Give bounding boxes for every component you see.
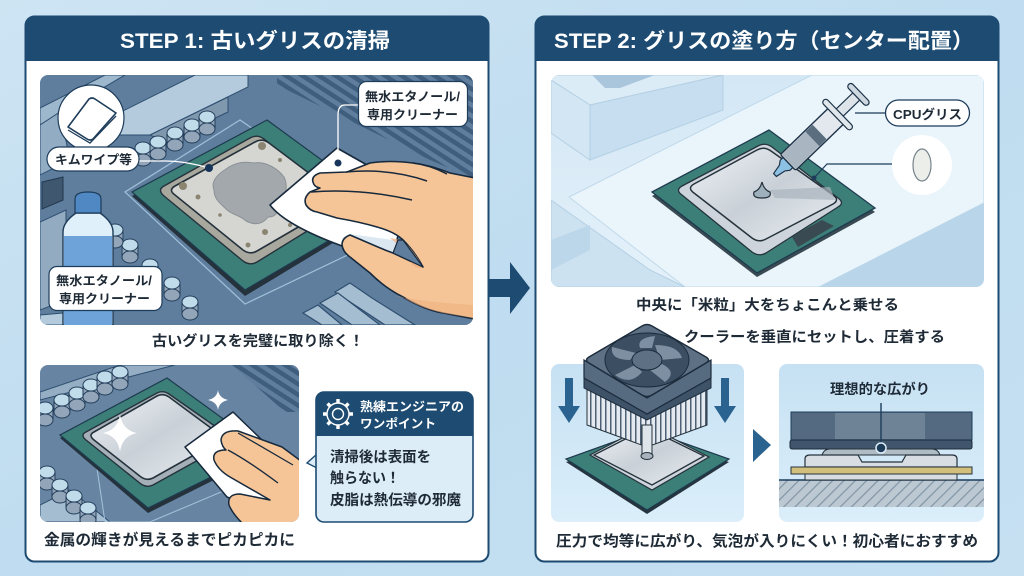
- heatsink fins: [277, 75, 473, 178]
- label: kimwipe: [47, 147, 139, 171]
- illustration: cross-section of spread: [779, 364, 984, 522]
- label: cleaner top: 専用クリーナー: [367, 107, 458, 122]
- caption: rice-grain amount: 中央に「米粒」大をちょこんと乗せる: [636, 296, 899, 314]
- icon: rice grain: [812, 135, 952, 195]
- fan: [605, 333, 689, 387]
- syringe shadow: [770, 187, 835, 200]
- callout: engineer one-point tip: 触らない！: [330, 470, 400, 487]
- capacitors: [40, 402, 54, 426]
- desk surface: [569, 75, 984, 287]
- socket outline: [124, 119, 348, 305]
- cpu below cooler: [566, 434, 729, 514]
- arrow: left down: [558, 378, 580, 423]
- arrow: to cross-section: [753, 429, 771, 462]
- step 2 header bar: [535, 16, 999, 61]
- step 1 heading: STEP 1: 古いグリスの清掃: [120, 29, 390, 53]
- icon: syringe: [761, 78, 874, 189]
- spray bottle: [63, 192, 113, 325]
- label: cpu grease: CPUグリス: [893, 107, 962, 122]
- old grease blob: [213, 162, 286, 224]
- cooler body: [791, 412, 972, 440]
- callout: engineer one-point tip: 清掃後は表面を: [330, 448, 431, 466]
- capacitors: [135, 142, 151, 166]
- cooler top: [586, 324, 708, 396]
- illustration: applying grease with syringe: [551, 75, 984, 287]
- heatsink fins: [232, 365, 299, 412]
- cpu pcb: [60, 437, 212, 513]
- illustration: polished CPU: [37, 365, 305, 530]
- cpu pcb: [652, 194, 875, 277]
- label: cleaner top: [358, 82, 468, 126]
- cpu heat spreader: [83, 392, 232, 486]
- callout: engineer one-point tip: ワンポイント: [360, 416, 436, 431]
- sparkles: [103, 414, 137, 452]
- caption: spreads evenly: 圧力で均等に広がり、気泡が入りにくい！初心者におすすめ: [556, 532, 978, 550]
- grease dollop: [754, 182, 770, 198]
- background pc box: [552, 75, 720, 86]
- callout: engineer one-point tip: 皮脂は熱伝導の邪魔: [330, 491, 462, 509]
- heading: set cooler vertically: クーラーを垂直にセットし、圧着する: [684, 328, 945, 346]
- label line: cloth: [138, 161, 213, 172]
- heat spreader: [805, 455, 957, 467]
- step 1 header bar: [25, 16, 489, 61]
- cpu heat spreader: [678, 144, 842, 255]
- arrow: step 1 to step 2: [489, 262, 530, 314]
- lower-left connector: [40, 210, 66, 310]
- cpu pcb: [132, 194, 332, 296]
- label: cleaner top: 無水エタノール/: [365, 89, 461, 104]
- label line: cleaner at cloth: [334, 105, 358, 166]
- icon: folded wipe: [58, 85, 124, 151]
- label: cpu grease: [855, 100, 970, 126]
- caption: polish until metal shines: 金属の輝きが見えるまでピカピカに: [44, 530, 295, 549]
- hand: [213, 430, 299, 522]
- heatsink fins: [587, 390, 707, 447]
- label: cleaner bottle: 無水エタノール/: [56, 273, 153, 288]
- panel: step 2: [535, 16, 999, 562]
- hand: [305, 162, 480, 320]
- wipe cloth: [184, 411, 266, 498]
- step 2 heading: STEP 2: グリスの塗り方（センター配置）: [554, 29, 974, 53]
- memory slots: [40, 75, 248, 175]
- cooler frame lower: [584, 378, 711, 420]
- callout: engineer one-point tip: 熟練エンジニアの: [360, 399, 464, 414]
- label: ideal spread: 理想的な広がり: [830, 381, 930, 397]
- desk hatch: [779, 480, 984, 507]
- cpu substrate: [791, 467, 972, 474]
- label: cleaner bottle: 専用クリーナー: [59, 291, 150, 306]
- icon: gear: [323, 399, 353, 429]
- foreground shelves: [551, 200, 685, 287]
- label: cleaner bottle: [49, 266, 162, 310]
- wipe cloth: [270, 148, 400, 250]
- marker line: [880, 403, 882, 446]
- spreading grease: [822, 449, 940, 455]
- illustration: cooler lowered onto cpu: [551, 324, 744, 522]
- panel: step 1: [25, 16, 489, 562]
- caption: remove old grease: 古いグリスを完璧に取り除く！: [152, 332, 364, 350]
- lower-right slots: [303, 283, 415, 325]
- label: kimwipe: キムワイプ等: [55, 152, 132, 167]
- residue specks: [179, 142, 292, 248]
- illustration: wiping old grease off the CPU: [40, 75, 480, 325]
- cooler frame side: [584, 360, 711, 414]
- arrow: right down: [714, 378, 736, 423]
- cpu heat spreader: [160, 136, 307, 264]
- callout: engineer one-point tip: [307, 392, 473, 522]
